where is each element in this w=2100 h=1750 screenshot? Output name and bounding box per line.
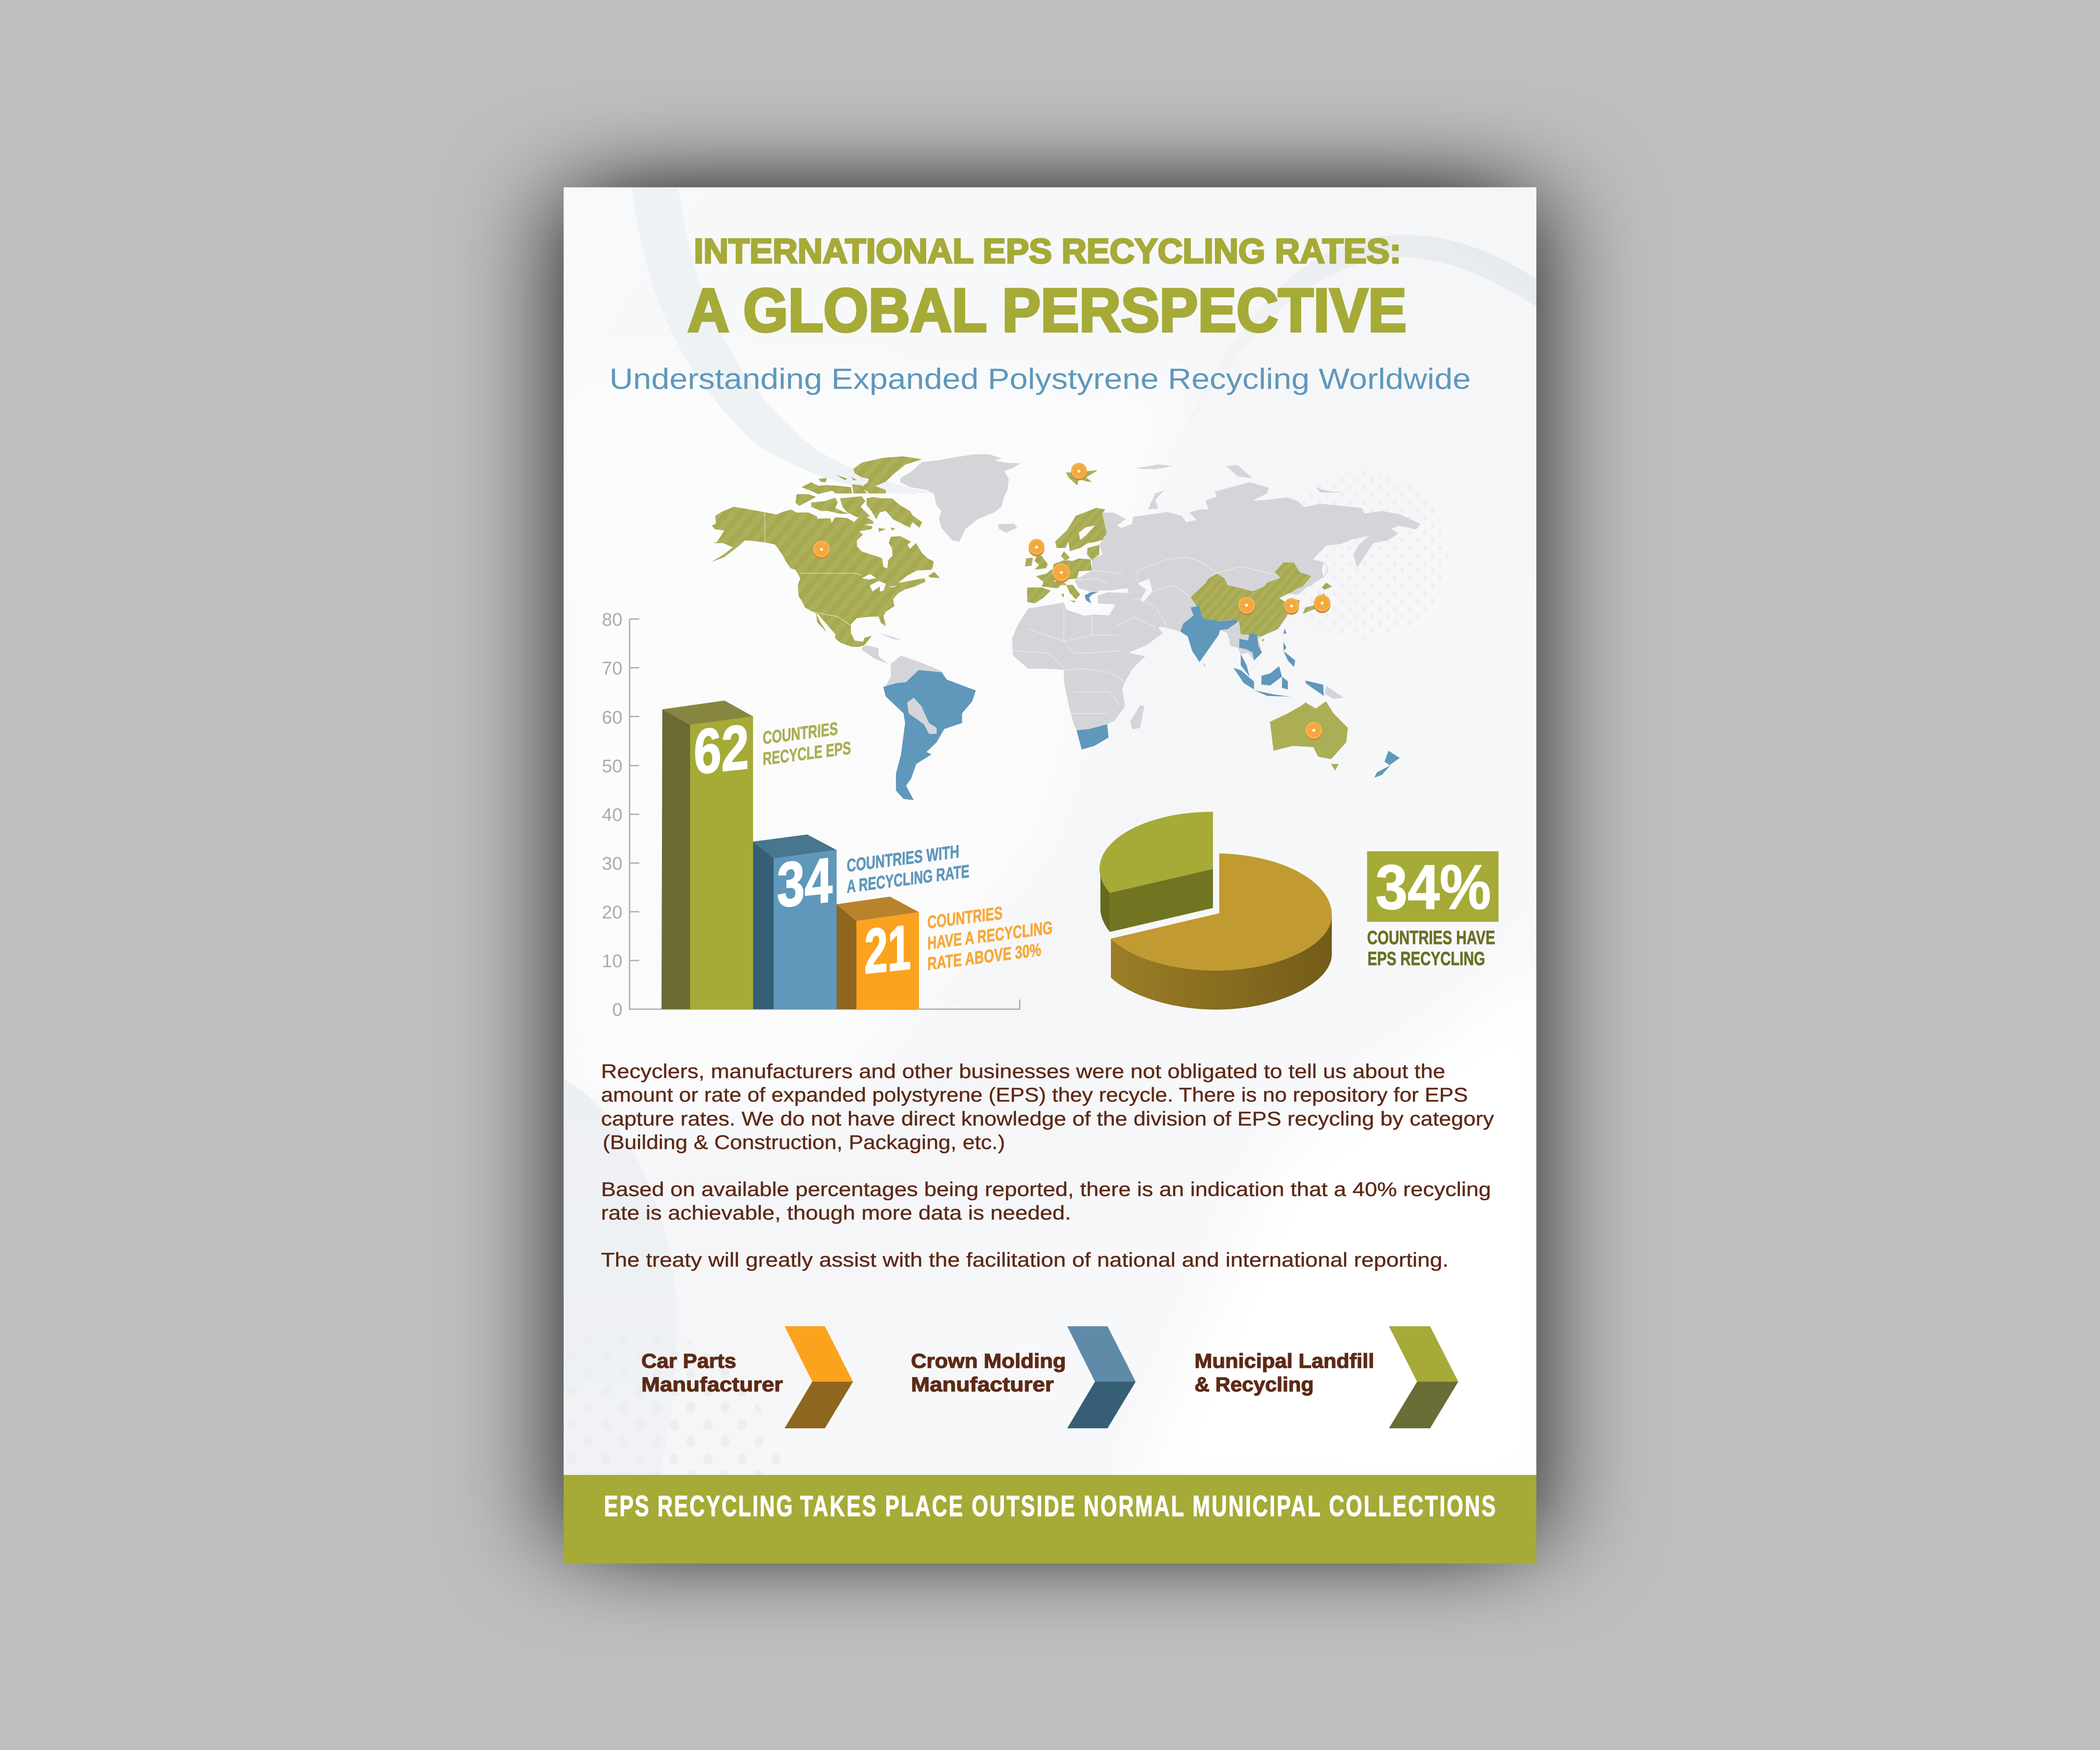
bar: 34 countries with a recycling rate: 34 <box>777 845 832 921</box>
axis labels: 20 <box>602 902 622 923</box>
bar: 62 countries recycle EPS: COUNTRIES <box>763 719 838 748</box>
bar: 21 countries above 30 percent <box>837 897 1053 1009</box>
axis labels: 40 <box>602 805 622 825</box>
axis labels: 60 <box>602 707 622 728</box>
body text: rate is achievable, though more data is needed. <box>601 1202 1071 1224</box>
bar: 62 countries recycle EPS <box>662 701 851 1009</box>
map: Eurasia <box>1025 464 1420 697</box>
map: North America and Greenland <box>711 454 1021 655</box>
step: municipal landfill and recycling: Municipal Landfill <box>1194 1350 1374 1372</box>
step: car parts manufacturer <box>641 1326 853 1428</box>
axis labels: 50 <box>602 756 622 777</box>
footer banner: TAKES PLACE OUTSIDE NORMAL MUNICIPAL COLLECTIONS <box>800 1490 1496 1522</box>
bar: 21 countries above 30 percent: 21 <box>864 912 911 987</box>
axis labels: 10 <box>602 951 622 971</box>
body text: (Building & Construction, Packaging, etc.) <box>603 1131 1005 1153</box>
step: car parts manufacturer: Car Parts <box>641 1350 736 1372</box>
bar chart <box>602 609 1053 1020</box>
title line 1: INTERNATIONAL EPS RECYCLING RATES: <box>694 231 1401 270</box>
bar: 21 countries above 30 percent: HAVE A RECYCLING <box>927 918 1053 954</box>
map: Africa, South America, Oceania <box>863 603 1400 800</box>
callout: 34 percent: EPS RECYCLING <box>1368 948 1485 969</box>
bar: 62 countries recycle EPS: RECYCLE EPS <box>763 738 851 769</box>
step: municipal landfill and recycling <box>1194 1326 1458 1428</box>
callout: 34 percent <box>1367 851 1499 969</box>
bar: 21 countries above 30 percent: COUNTRIES <box>927 903 1003 933</box>
step: car parts manufacturer: Manufacturer <box>641 1374 783 1396</box>
pie: small slice top <box>1100 812 1213 893</box>
step: crown molding manufacturer <box>911 1326 1136 1428</box>
chart axis <box>630 619 1020 1009</box>
callout: 34 percent: 34% <box>1376 852 1491 922</box>
subtitle: Understanding Expanded Polystyrene Recycling Worldwide <box>609 362 1471 395</box>
step: crown molding manufacturer: Manufacturer <box>911 1374 1054 1396</box>
axis labels: 30 <box>602 853 622 874</box>
pie: large slice side <box>1111 915 1332 1010</box>
pie chart <box>1100 812 1332 1010</box>
footer banner: EPS RECYCLING <box>604 1490 793 1522</box>
axis labels <box>602 609 622 1020</box>
body text: Based on available percentages being reported, there is an indication that a 40% recycling <box>601 1178 1491 1200</box>
paper drop shadow <box>572 192 1528 1545</box>
body text: Recyclers, manufacturers and other businesses were not obligated to tell us about the <box>601 1060 1445 1082</box>
step: crown molding manufacturer: Crown Molding <box>911 1350 1066 1372</box>
callout: 34 percent: COUNTRIES HAVE <box>1367 927 1495 948</box>
pie: small slice wall <box>1110 869 1213 932</box>
body text: The treaty will greatly assist with the facilitation of national and international reporting. <box>601 1249 1449 1271</box>
bar: 34 countries with a recycling rate <box>753 834 969 1009</box>
bar: 34 countries with a recycling rate: A RECYCLING RATE <box>847 861 969 897</box>
body text: amount or rate of expanded polystyrene (EPS) they recycle. There is no repository for EPS <box>601 1084 1468 1106</box>
map pins <box>813 463 1331 740</box>
body text: capture rates. We do not have direct knowledge of the division of EPS recycling by category <box>601 1107 1494 1130</box>
bar: 34 countries with a recycling rate: COUNTRIES WITH <box>847 842 959 876</box>
pie: small slice side <box>1100 872 1110 932</box>
infographic poster <box>478 117 1622 1619</box>
step: municipal landfill and recycling: & Recycling <box>1194 1374 1314 1396</box>
paper background <box>564 187 1536 1475</box>
title line 2: A GLOBAL PERSPECTIVE <box>688 276 1407 344</box>
axis labels: 0 <box>612 1000 622 1020</box>
axis labels: 70 <box>602 658 622 679</box>
axis labels: 80 <box>602 609 622 630</box>
bar: 62 countries recycle EPS: 62 <box>694 711 749 787</box>
pie: large slice top <box>1111 853 1332 971</box>
footer banner <box>564 1475 1536 1564</box>
bar: 21 countries above 30 percent: RATE ABOVE 30% <box>927 939 1041 974</box>
body text <box>601 1060 1494 1271</box>
world map <box>711 454 1420 800</box>
